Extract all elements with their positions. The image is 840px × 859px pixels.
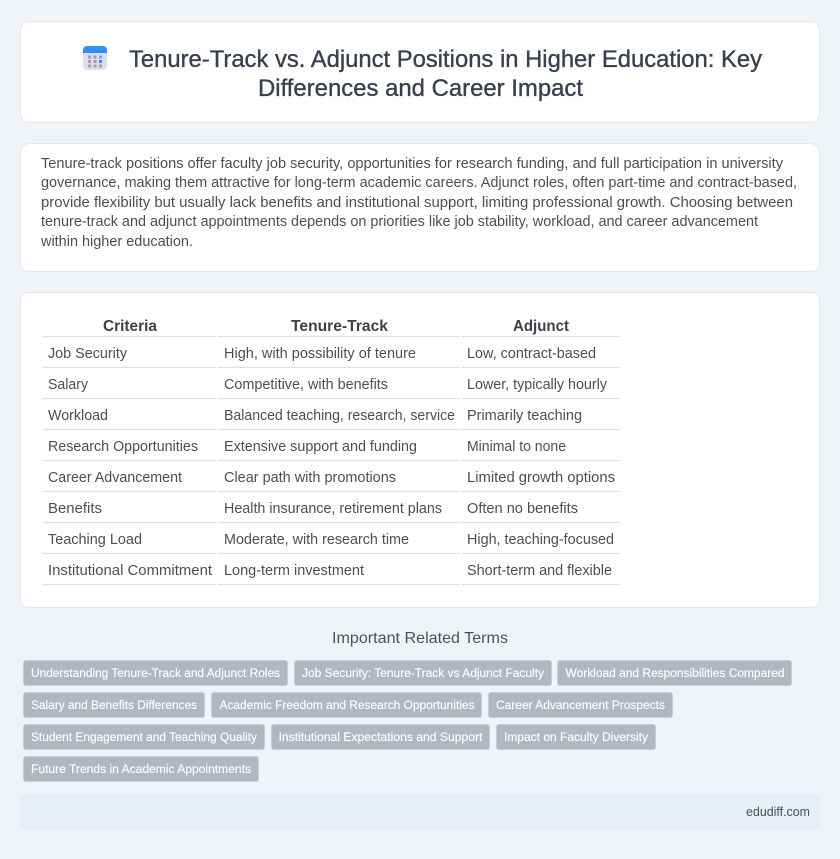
row: career advancement: Limited growth options — [467, 470, 615, 486]
tag: Workload and Responsibilities Compared — [566, 666, 784, 680]
row: benefits — [48, 501, 578, 517]
tag: Impact on Faculty Diversity — [504, 730, 649, 744]
panel: comparison table — [20, 292, 820, 608]
row: teaching load: High, teaching-focused — [467, 532, 614, 548]
table header: Adjunct — [513, 318, 570, 335]
title — [129, 46, 762, 102]
text block: introduction: Tenure-track positions offer faculty job security, opportunities for research funding, and full participation in university — [41, 156, 784, 172]
tag — [212, 692, 482, 718]
row: institutional commitment: Long-term investment — [224, 563, 364, 579]
row: institutional commitment: Institutional Commitment — [48, 563, 212, 579]
row: workload: Balanced teaching, research, service — [224, 408, 455, 424]
row: workload: Workload — [48, 408, 108, 424]
row: salary — [48, 377, 608, 393]
tag — [272, 724, 490, 750]
row: benefits: Health insurance, retirement plans — [224, 501, 442, 517]
footer — [20, 795, 820, 829]
tag — [24, 692, 204, 718]
text block: introduction: within higher education. — [40, 234, 193, 250]
tag: Academic Freedom and Research Opportunities — [220, 698, 474, 712]
row: workload — [48, 408, 582, 424]
tag: Understanding Tenure-Track and Adjunct Roles — [31, 666, 280, 680]
row: teaching load — [48, 532, 614, 548]
tag — [24, 724, 264, 750]
tag — [488, 692, 672, 718]
panel: header — [20, 22, 820, 122]
tag: Student Engagement and Teaching Quality — [31, 730, 258, 744]
row: job security: Low, contract-based — [467, 346, 596, 362]
table header: Tenure-Track — [291, 318, 388, 335]
tag: Institutional Expectations and Support — [278, 730, 483, 744]
text block: introduction — [40, 156, 797, 250]
tag list: related terms — [24, 660, 792, 782]
row: institutional commitment: Short-term and flexible — [467, 563, 612, 579]
panel: introduction — [20, 144, 820, 272]
table header: Criteria — [103, 318, 157, 335]
tag: Future Trends in Academic Appointments — [31, 762, 251, 776]
tag — [294, 660, 552, 686]
row: teaching load: Teaching Load — [48, 532, 142, 548]
table header — [103, 318, 570, 335]
title: Differences and Career Impact — [258, 75, 583, 102]
row: career advancement: Clear path with promotions — [224, 470, 396, 486]
row: job security: High, with possibility of tenure — [224, 346, 416, 362]
text block: introduction: tenure-track and adjunct appointments depends on priorities like job stability, workload, and career advancement — [41, 214, 758, 230]
row: salary: Lower, typically hourly — [467, 377, 608, 393]
row: research opportunities — [48, 439, 566, 455]
icon: calendar — [83, 46, 107, 70]
row: job security — [48, 346, 596, 362]
row: institutional commitment — [48, 563, 612, 579]
text block: introduction: provide flexibility but usually lack benefits and institutional support, limiting professional growth. Choosing between — [41, 195, 793, 211]
tag — [24, 660, 288, 686]
text block: introduction: governance, making them attractive for long-term academic careers. Adjunct roles, often part-time and contract-based, — [41, 175, 797, 191]
tag — [558, 660, 792, 686]
row: benefits: Often no benefits — [467, 501, 578, 517]
row: benefits: Benefits — [48, 501, 102, 517]
row: salary: Salary — [48, 377, 89, 393]
row: career advancement: Career Advancement — [48, 470, 182, 486]
row: career advancement — [48, 470, 615, 486]
row: research opportunities: Minimal to none — [467, 439, 566, 455]
row: job security: Job Security — [48, 346, 128, 362]
row: research opportunities: Research Opportunities — [48, 439, 198, 455]
heading: important related terms: Important Related Terms — [332, 630, 508, 647]
tag: Job Security: Tenure-Track vs Adjunct Faculty — [302, 666, 545, 680]
row: research opportunities: Extensive support and funding — [224, 439, 417, 455]
title: Tenure-Track vs. Adjunct Positions in Higher Education: Key — [129, 46, 762, 73]
row: workload: Primarily teaching — [467, 408, 582, 424]
footer: edudiff.com — [746, 804, 810, 819]
row: salary: Competitive, with benefits — [224, 377, 388, 393]
tag — [24, 756, 258, 782]
tag: Salary and Benefits Differences — [31, 698, 197, 712]
tag: Career Advancement Prospects — [496, 698, 665, 712]
row: teaching load: Moderate, with research time — [224, 532, 409, 548]
tag — [496, 724, 656, 750]
